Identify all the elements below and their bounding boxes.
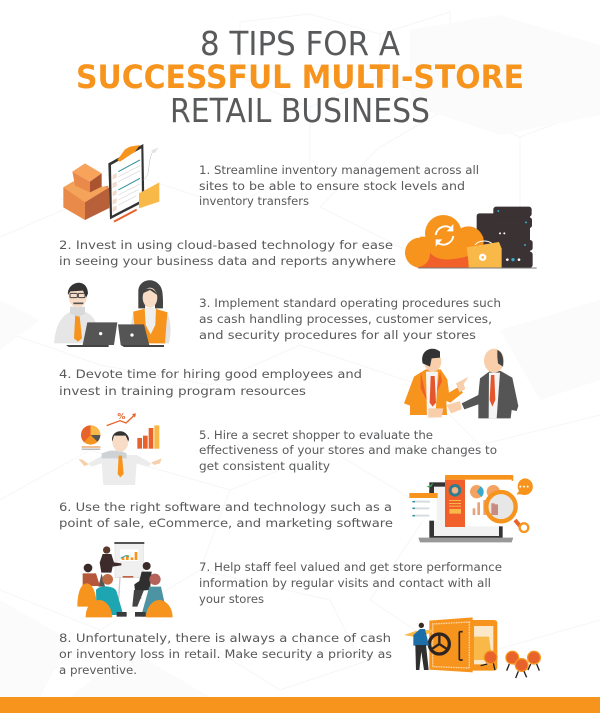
tip 4 text xyxy=(59,367,362,398)
tip 3 text: as cash handling processes, customer services, xyxy=(199,312,492,326)
tip 7 text xyxy=(199,560,502,606)
tip 2 text: 2. Invest in using cloud-based technology for ease xyxy=(59,238,393,252)
icon: two businessmen shaking hands xyxy=(404,349,518,418)
icon: presenter with charts xyxy=(78,412,162,485)
tip 5 text xyxy=(199,428,497,473)
icon: laptop with analytics and magnifier xyxy=(409,475,533,542)
icon: boxes and clipboard xyxy=(63,144,159,222)
tip 5 text: get consistent quality xyxy=(199,459,330,473)
tip 1 text: inventory transfers xyxy=(199,194,309,208)
icon: safe with businessman and running coins xyxy=(404,617,540,678)
tip 3 text: 3. Implement standard operating procedures such xyxy=(199,296,501,310)
tip 1 text: sites to be able to ensure stock levels and xyxy=(199,179,465,193)
tip 4 text: invest in training program resources xyxy=(59,384,306,398)
title: SUCCESSFUL MULTI-STORE xyxy=(76,58,524,96)
tip 5 text: effectiveness of your stores and make changes to xyxy=(199,443,497,457)
footer bar xyxy=(0,697,600,713)
tip 6 text xyxy=(59,500,393,530)
title xyxy=(76,24,524,130)
tip 4 text: 4. Devote time for hiring good employees and xyxy=(59,367,362,381)
tip 6 text: point of sale, eCommerce, and marketing software xyxy=(59,516,393,530)
icon: presenter with charts: % xyxy=(117,412,125,421)
tip 8 text xyxy=(59,631,392,677)
tip 1 text: 1. Streamline inventory management across all xyxy=(199,163,479,177)
tip 3 text: and security procedures for all your stores xyxy=(199,328,476,342)
tip 7 text: 7. Help staff feel valued and get store performance xyxy=(199,560,502,574)
tip 1 text xyxy=(199,163,479,208)
title: 8 TIPS FOR A xyxy=(200,24,400,63)
tip 8 text: or inventory loss in retail. Make security a priority as xyxy=(59,647,392,661)
tip 7 text: information by regular visits and contact with all xyxy=(199,576,491,590)
tip 2 text: in seeing your business data and reports anywhere xyxy=(59,254,396,268)
tip 5 text: 5. Hire a secret shopper to evaluate the xyxy=(199,428,433,442)
title: RETAIL BUSINESS xyxy=(170,91,430,130)
tip 2 text xyxy=(59,238,396,268)
tip 7 text: your stores xyxy=(199,592,264,606)
tip 8 text: 8. Unfortunately, there is always a chance of cash xyxy=(59,631,391,645)
tip 8 text: a preventive. xyxy=(59,663,137,677)
icon: cloud and servers xyxy=(405,207,537,268)
tip 3 text xyxy=(199,296,501,342)
icon: support agents with laptops xyxy=(54,280,171,347)
tip 6 text: 6. Use the right software and technology such as a xyxy=(59,500,392,514)
icon: team meeting with presenter xyxy=(77,542,173,617)
